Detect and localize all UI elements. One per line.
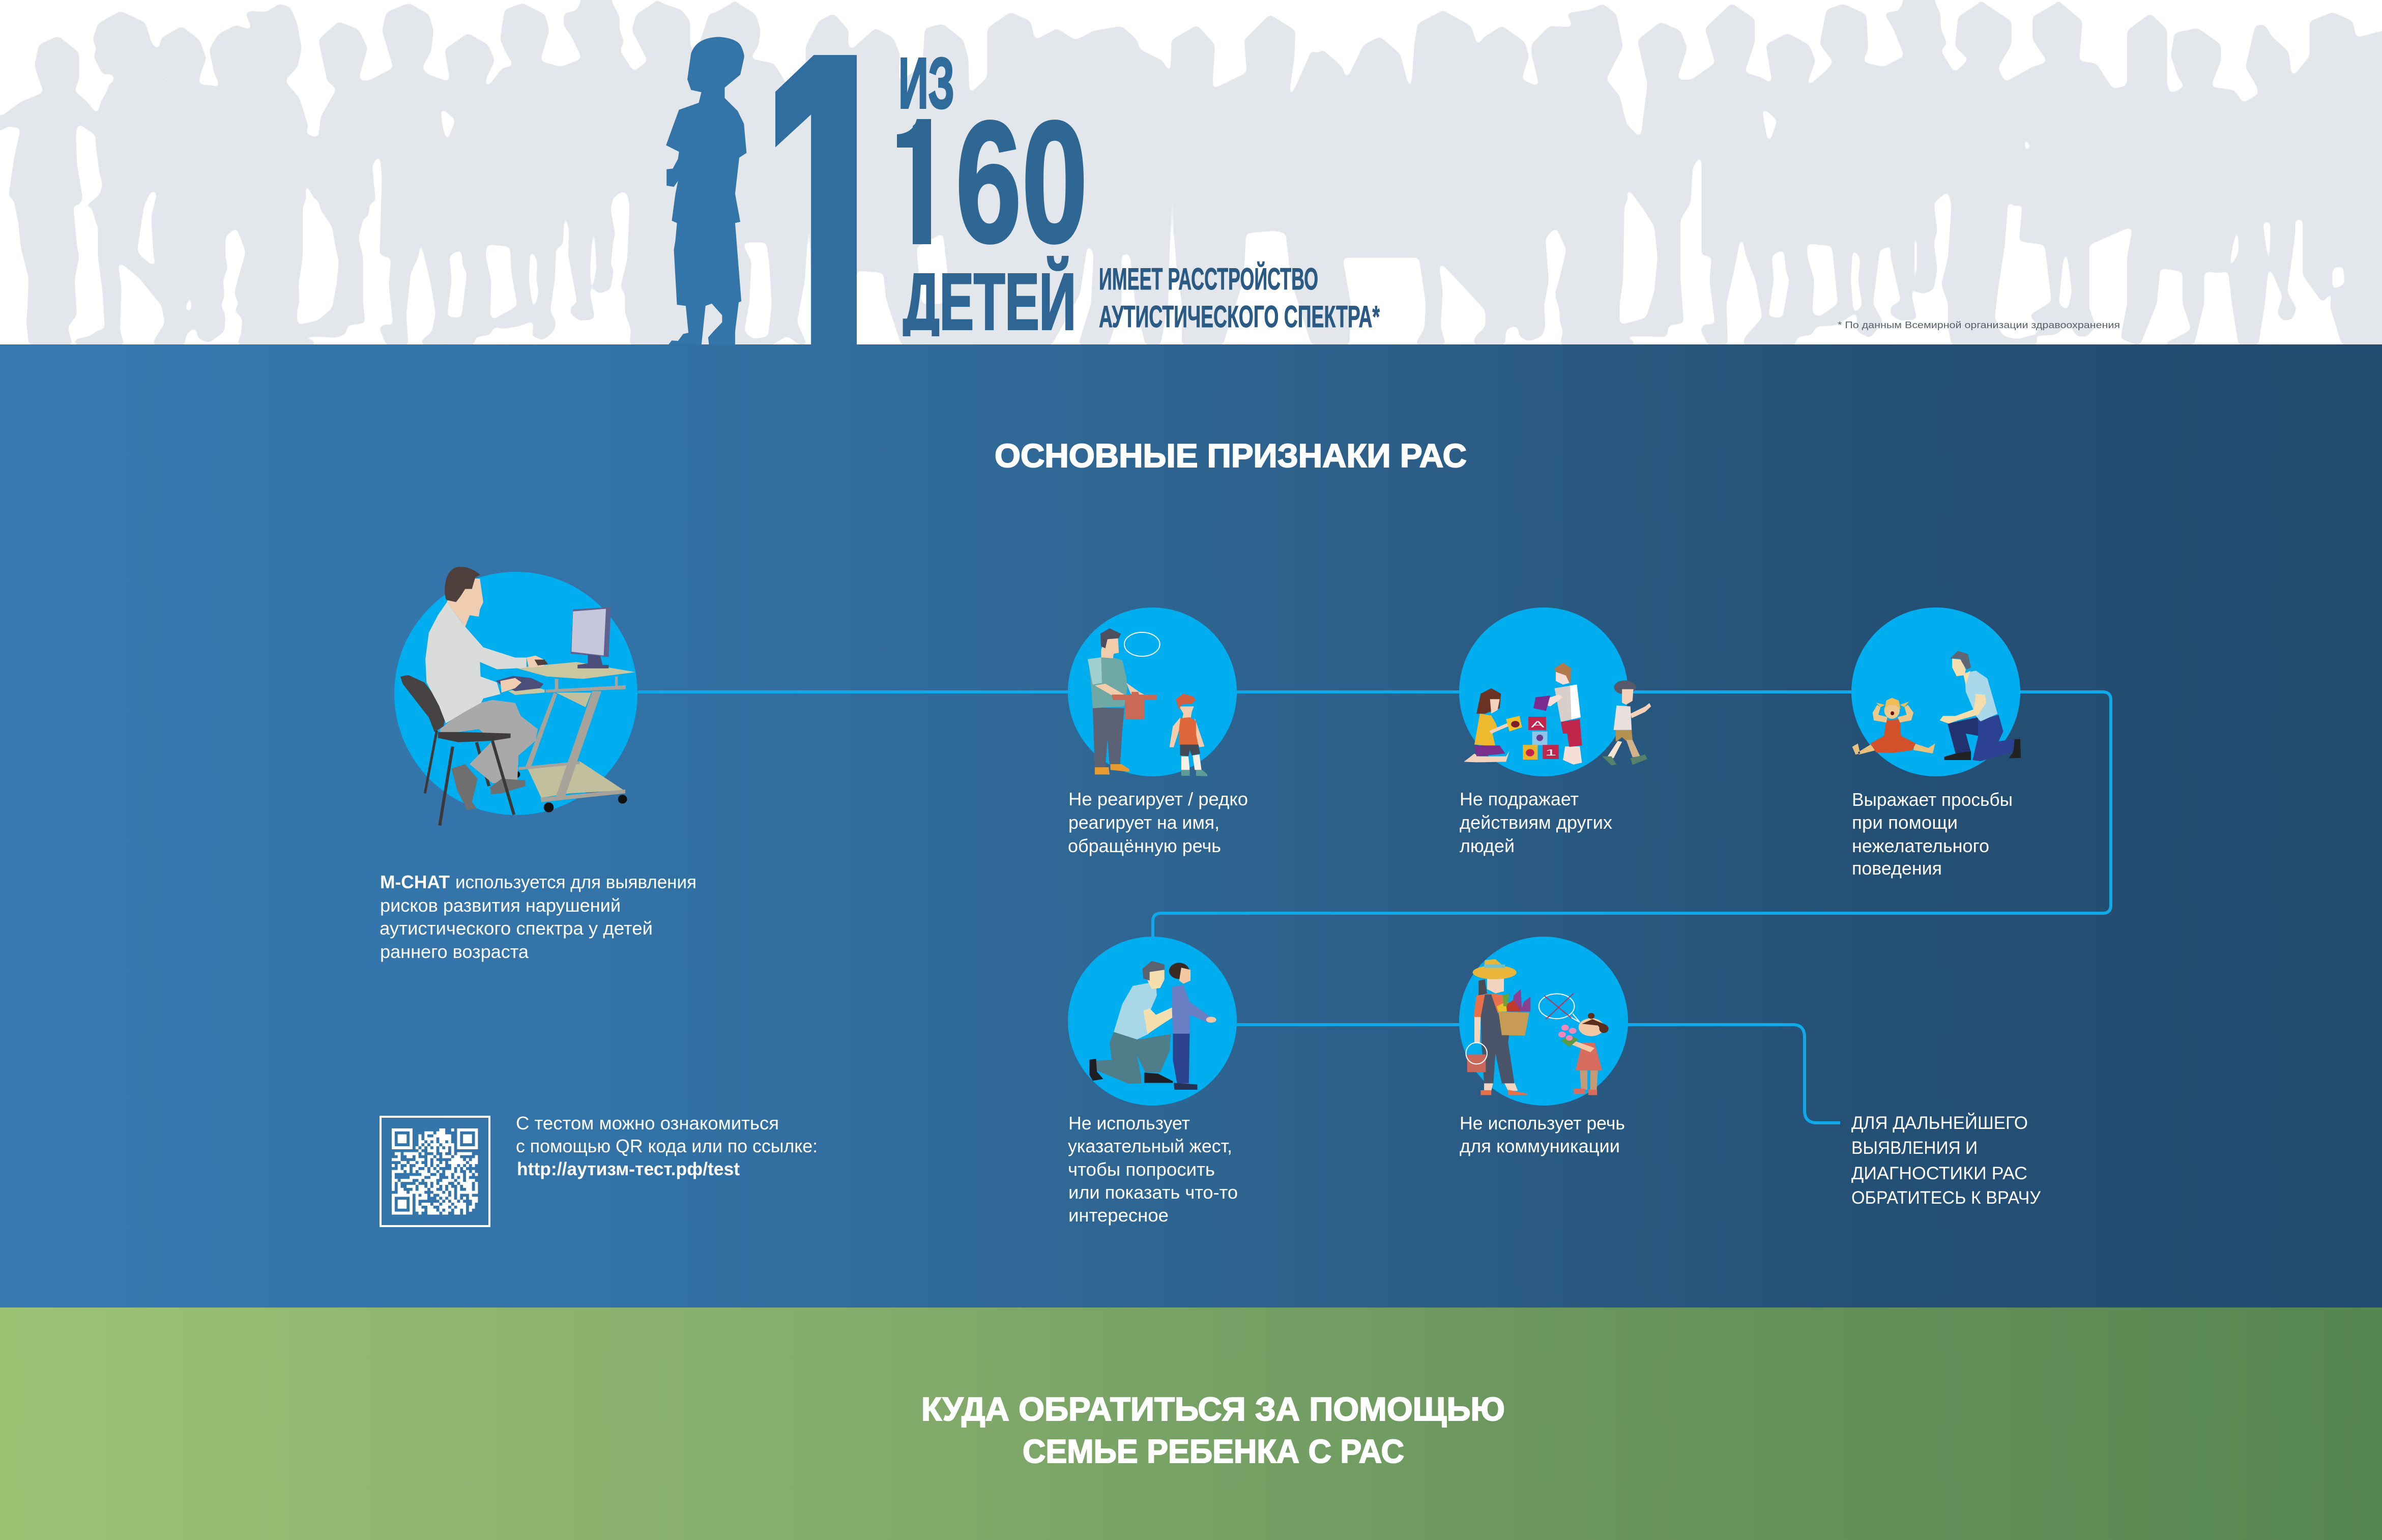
text: sign 5: [1460, 1113, 1625, 1156]
connector lines: [638, 692, 2111, 1123]
silhouettes: right group: [1320, 0, 2382, 345]
text: sign 4: Не использует: [1068, 1113, 1190, 1134]
text: sign 5: для коммуникации: [1460, 1136, 1620, 1156]
text: sign 4: чтобы попросить: [1068, 1159, 1215, 1180]
sign 3: undesirable behaviour: [1851, 607, 2021, 879]
icon: children with blocks: 1: [1545, 748, 1556, 758]
text: sign 4: указательный жест,: [1068, 1136, 1232, 1156]
text: sign 2: людей: [1460, 835, 1515, 856]
callout: consult a doctor: ОБРАТИТЕСЬ К ВРАЧУ: [1851, 1188, 2041, 1208]
text: sign 3: поведения: [1852, 858, 1942, 879]
text: sign 1: [1068, 789, 1248, 856]
icon: children with blocks: [1464, 663, 1651, 766]
text: sign 1: реагирует на имя,: [1068, 812, 1219, 833]
heading: where to get help: [921, 1390, 1505, 1470]
silhouettes: centre group: [712, 1, 1343, 345]
text: QR instructions: С тестом можно ознакомиться: [516, 1113, 779, 1134]
text: sign 2: действиям других: [1460, 812, 1612, 833]
text: sign 5: Не использует речь: [1460, 1113, 1625, 1134]
callout: consult a doctor: ДИАГНОСТИКИ РАС: [1851, 1164, 2027, 1183]
headline: 160: [897, 119, 1084, 245]
headline: has disorder text: ИМЕЕТ РАССТРОЙСТВО: [1099, 262, 1318, 296]
panel: green help section: [0, 1307, 2382, 1540]
text: sign 4: [1068, 1113, 1238, 1226]
callout: consult a doctor: ВЫЯВЛЕНИЯ И: [1851, 1138, 1978, 1158]
text: sign 1: Не реагирует / редко: [1068, 789, 1248, 809]
panel: blue signs section: [0, 344, 2382, 1308]
headline: 160: 160: [889, 85, 1088, 279]
text: sign 3: Выражает просьбы: [1852, 789, 2013, 810]
icon: children with blocks: A: [1531, 719, 1545, 729]
icon: crying girl and father: [1852, 651, 2021, 761]
text: M-CHAT description: используется для выявления: [455, 871, 696, 892]
heading: signs of ASD: ОСНОВНЫЕ ПРИЗНАКИ РАС: [995, 437, 1467, 474]
heading: where to get help: КУДА ОБРАТИТЬСЯ ЗА ПОМОЩЬЮ: [921, 1390, 1505, 1428]
sign 5: no speech: [1459, 937, 1628, 1156]
sign 4: no pointing gesture: [1068, 937, 1238, 1226]
text: sign 4: интересное: [1068, 1205, 1169, 1226]
headline: has disorder text: [1099, 262, 1380, 334]
headline: детей: ДЕТЕЙ: [903, 256, 1076, 346]
heading: where to get help: СЕМЬЕ РЕБЕНКА С РАС: [1023, 1433, 1404, 1470]
text: QR instructions: [516, 1113, 818, 1179]
text: sign 4: или показать что-то: [1068, 1182, 1238, 1203]
text: sign 2: [1460, 789, 1612, 856]
silhouettes: left group: [0, 0, 712, 345]
text: QR instructions: http://аутизм-тест.рф/test: [517, 1158, 740, 1179]
text: M-CHAT description: M-CHAT: [380, 871, 450, 892]
text: M-CHAT description: раннего возраста: [380, 941, 529, 962]
text: QR instructions: с помощью QR кода или по ссылке:: [516, 1136, 818, 1156]
text: sign 3: [1852, 789, 2013, 879]
icon: QR code: [381, 1117, 489, 1226]
footnote: * По данным Всемирной организации здравоохранения: [1838, 320, 2120, 330]
text: M-CHAT description: аутистического спектра у детей: [380, 918, 653, 939]
headline: has disorder text: АУТИСТИЧЕСКОГО СПЕКТРА*: [1099, 300, 1380, 334]
icon: woman with basket and girl: [1466, 959, 1609, 1095]
callout: consult a doctor: ДЛЯ ДАЛЬНЕЙШЕГО: [1851, 1113, 2028, 1133]
sign 2: no imitation: [1459, 607, 1651, 856]
icon: man at computer: [394, 567, 637, 826]
text: M-CHAT description: рисков развития нарушений: [380, 895, 621, 916]
text: sign 3: нежелательного: [1852, 835, 1989, 856]
headline: из: ИЗ: [898, 43, 954, 123]
text: sign 1: обращённую речь: [1068, 835, 1221, 856]
text: sign 3: при помощи: [1852, 812, 1958, 833]
icon: father and boy: [1089, 961, 1216, 1090]
silhouettes: crowd of children: [0, 0, 2382, 356]
icon: father and son: [1088, 628, 1207, 776]
text: sign 2: Не подражает: [1460, 789, 1579, 809]
sign 1: no response to name: [1068, 607, 1248, 856]
icon: blue child silhouette: [666, 37, 746, 345]
callout: consult a doctor: [1851, 1113, 2041, 1208]
text: M-CHAT description: [380, 871, 696, 962]
